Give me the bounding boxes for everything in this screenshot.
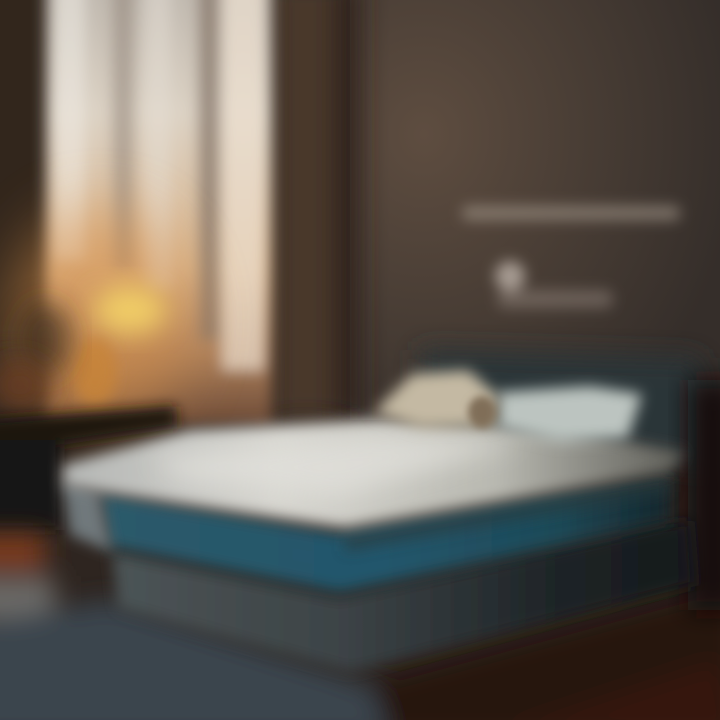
wall text line one	[462, 206, 680, 220]
mattress top	[62, 420, 685, 528]
blurred wall text	[462, 206, 680, 308]
bed	[62, 350, 720, 672]
blue mattress band	[100, 476, 670, 592]
curtain	[46, 0, 272, 425]
bed base	[112, 520, 695, 672]
lamp glow	[0, 210, 190, 430]
wall text line two	[495, 261, 613, 308]
side table	[0, 406, 178, 530]
mattress corner	[62, 480, 112, 552]
dark right side	[688, 380, 720, 610]
floor: carpet and dark wood	[0, 535, 720, 720]
left cream pillow	[374, 370, 498, 428]
curtain folds	[55, 0, 264, 370]
right pillow	[498, 386, 642, 442]
mattress front edge shadow	[345, 478, 670, 552]
left wall strip	[0, 0, 46, 340]
headboard	[420, 350, 715, 470]
pillar beside curtain	[272, 0, 360, 420]
